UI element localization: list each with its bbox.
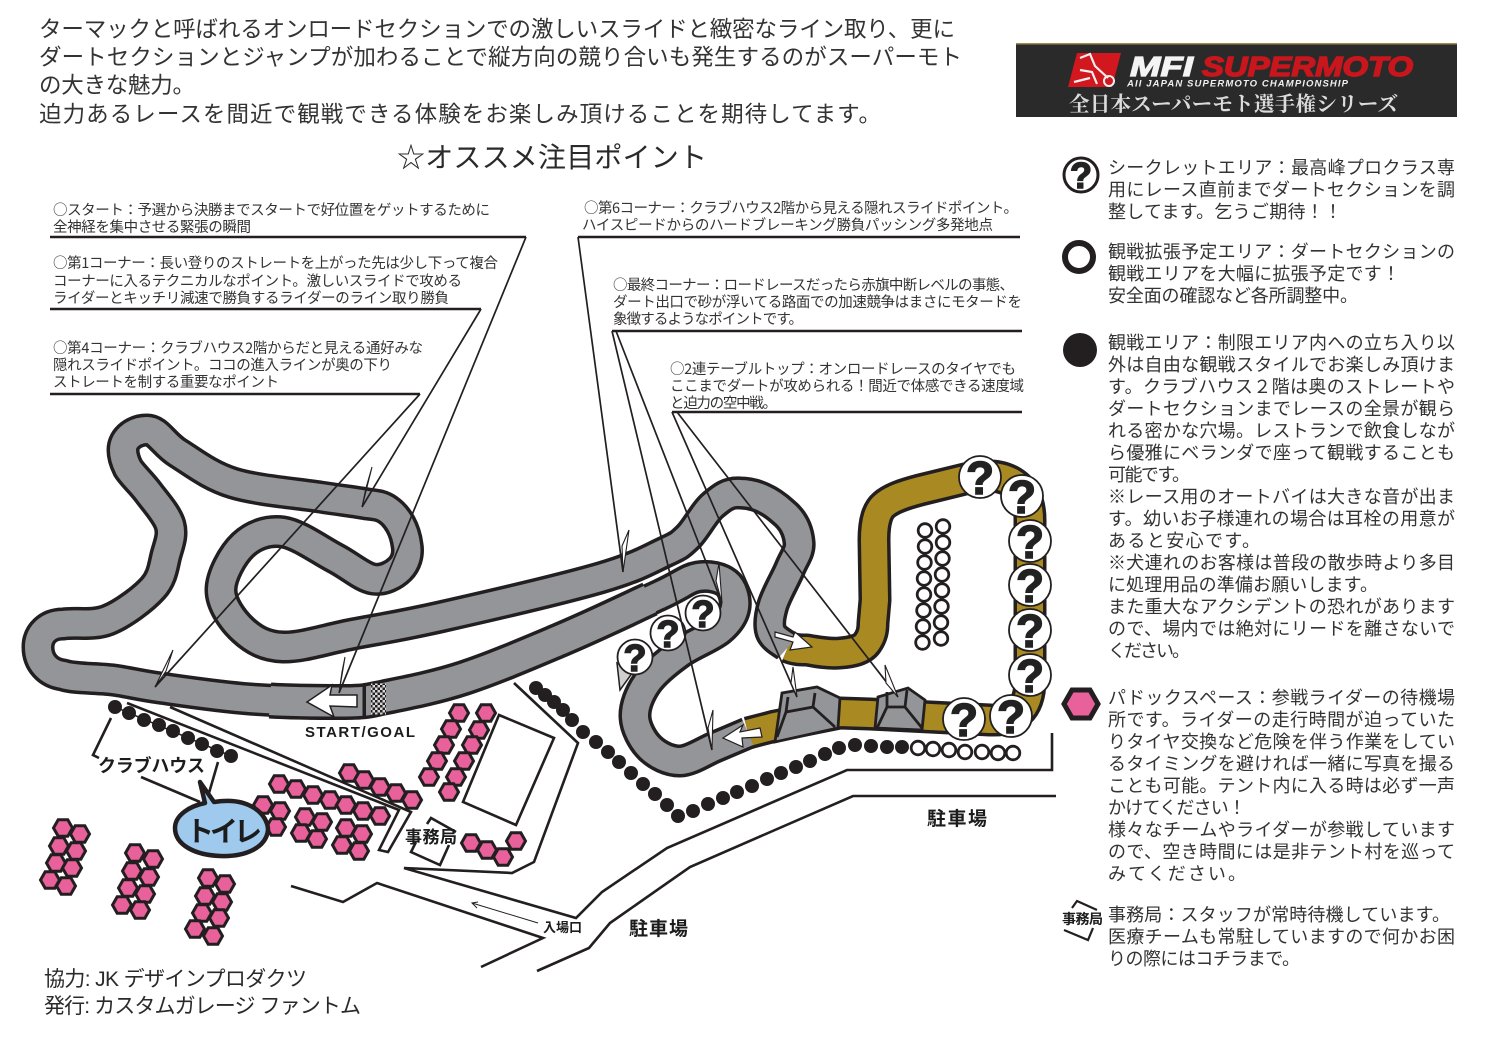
legend: viewing area: ※レース用のオートバイは大きな音が出ま bbox=[1108, 487, 1455, 507]
secret area markers: ? bbox=[1016, 605, 1044, 657]
arrow: direction at start bbox=[307, 685, 357, 717]
legend: paddock: ので、空き時間には是非テント村を巡って bbox=[1108, 842, 1455, 862]
callout: double tabletop: ○2連テーブルトップ：オンロードレースのタイヤでも bbox=[670, 358, 1016, 379]
map labels: 事務局 bbox=[405, 828, 457, 847]
callout: final corner: 象徴するようなポイントです。 bbox=[613, 308, 803, 329]
legend: secret area: 整してます。乞うご期待！！ bbox=[1108, 202, 1342, 222]
secret area markers: ? bbox=[1008, 471, 1036, 523]
icon: open circle bbox=[1065, 243, 1093, 271]
icon: motorcycle logo mark bbox=[1068, 53, 1121, 87]
legend: office: 医療チームも常駐していますので何かお困 bbox=[1108, 927, 1455, 947]
paddock tents bbox=[40, 705, 526, 944]
map labels: クラブハウス bbox=[98, 755, 205, 776]
callout: corner 4: ○第4コーナー：クラブハウス2階からだと見える通好みな bbox=[53, 337, 423, 358]
secret area markers: ? bbox=[1016, 516, 1044, 568]
logo banner: SUPERMOTO bbox=[1202, 51, 1413, 82]
track: dirt section fill bbox=[748, 476, 1030, 733]
map labels: START/GOAL bbox=[305, 724, 415, 741]
intro text block: 迫力あるレースを間近で観戦できる体験をお楽しみ頂けることを期待してます。 bbox=[39, 102, 881, 127]
map labels: 駐車場 bbox=[629, 918, 688, 940]
callouts: left annotations bbox=[50, 199, 526, 693]
legend: paddock bbox=[1064, 688, 1455, 884]
arrow: direction at dirt exit bbox=[723, 725, 762, 747]
callout: double tabletop: と迫力の空中戦。 bbox=[670, 392, 777, 413]
intro text block bbox=[39, 17, 962, 127]
map labels: 入場口 bbox=[543, 920, 582, 935]
map labels: 駐車場 bbox=[927, 808, 987, 830]
callout: final corner bbox=[612, 274, 1022, 750]
legend: secret area: シークレットエリア：最高峰プロクラス専 bbox=[1108, 158, 1455, 178]
legend: viewing area: 可能です。 bbox=[1108, 465, 1190, 485]
callout: double tabletop: ここまでダートが攻められる！間近で体感できる速度域 bbox=[670, 375, 1024, 396]
legend: paddock: 所です。ライダーの走行時間が迫っていた bbox=[1108, 710, 1455, 730]
legend: viewing area: 観戦エリア：制限エリア内への立ち入り以 bbox=[1108, 333, 1455, 353]
logo banner bbox=[1016, 43, 1457, 117]
secret area markers: ? bbox=[656, 614, 680, 656]
callout: final corner: ダート出口で砂が浮いてる路面での加速競争はまさにモタードを bbox=[613, 291, 1022, 312]
legend: viewing area: ら優雅にベランダで座って観戦することも bbox=[1108, 443, 1455, 463]
legend: viewing area: あると安心です。 bbox=[1108, 531, 1260, 551]
legend: viewing area: ので、場内では絶対にリードを離さないで bbox=[1108, 619, 1455, 639]
callout: corner 4 bbox=[50, 337, 423, 687]
credits: 協力: JK デザインプロダクツ bbox=[44, 968, 307, 991]
icon: solid circle bbox=[1063, 333, 1097, 367]
callout: corner 4: ストレートを制する重要なポイント bbox=[53, 371, 279, 392]
secret area markers: ? bbox=[623, 638, 647, 680]
secret area markers: ? bbox=[997, 691, 1025, 743]
intro text block: の大きな魅力。 bbox=[39, 73, 195, 98]
callout: start: ○スタート：予選から決勝までスタートで好位置をゲットするために bbox=[53, 199, 490, 220]
icon: pink hexagon bbox=[1064, 690, 1098, 718]
intro text block: ターマックと呼ばれるオンロードセクションでの激しいスライドと緻密なライン取り、更に bbox=[39, 17, 955, 42]
logo banner: MFI bbox=[1130, 51, 1195, 82]
heading: recommended points: ☆オススメ注目ポイント bbox=[397, 142, 707, 173]
legend: viewing area: ※犬連れのお客様は普段の散歩時より多目 bbox=[1108, 553, 1455, 573]
course map bbox=[38, 430, 1056, 971]
callout: start bbox=[50, 199, 526, 693]
callout: corner 1 bbox=[50, 252, 498, 507]
callout: corner 6: ハイスピードからのハードブレーキング勝負パッシング多発地点 bbox=[582, 214, 993, 235]
legend: viewing area: ダートセクションまでレースの全景が観ら bbox=[1108, 399, 1455, 419]
legend: office: りの際にはコチラまで。 bbox=[1108, 949, 1300, 969]
legend: paddock: パドックスペース：参戦ライダーの待機場 bbox=[1108, 688, 1455, 708]
start line and checker bbox=[362, 684, 386, 716]
map labels bbox=[98, 724, 987, 940]
icon: question mark bbox=[1064, 155, 1098, 196]
icon: question mark: ? bbox=[1070, 155, 1092, 196]
callout: corner 1: ○第1コーナー：長い登りのストレートを上がった先は少し下って複合 bbox=[53, 252, 498, 273]
solid spectator dots bbox=[108, 681, 909, 823]
legend: paddock: かけてください！ bbox=[1108, 798, 1246, 818]
small grey run-off next to jumps bbox=[617, 663, 633, 690]
tabletop jump 2 bbox=[875, 688, 925, 730]
legend: viewing area: 外は自由な観戦スタイルでお楽しみ頂けま bbox=[1108, 355, 1455, 375]
legend: paddock: るタイミングを避ければ一緒に写真を撮る bbox=[1108, 754, 1455, 774]
legend: paddock: みてください。 bbox=[1108, 864, 1246, 884]
callout: double tabletop bbox=[670, 358, 1024, 697]
callouts: right annotations bbox=[578, 197, 1024, 750]
icon: office: 事務局 bbox=[1062, 911, 1103, 927]
open spectator dots bbox=[911, 520, 1020, 760]
icon: office bbox=[1062, 901, 1103, 940]
legend: expansion area bbox=[1065, 242, 1455, 306]
legend: viewing area: れる密かな穴場。レストランで飲食しなが bbox=[1108, 421, 1455, 441]
legend: viewing area: す。幼いお子様連れの場合は耳栓の用意が bbox=[1108, 509, 1455, 529]
legend: paddock: ことも可能。テント内に入る時は必ず一声 bbox=[1108, 776, 1455, 796]
callout: corner 4: 隠れスライドポイント。ココの進入ラインが奥の下り bbox=[53, 354, 392, 375]
callout: corner 6 bbox=[578, 197, 1020, 572]
secret area markers: ? bbox=[691, 594, 715, 636]
legend: expansion area: 観戦エリアを大幅に拡張予定です！ bbox=[1108, 264, 1400, 284]
callout: final corner: ○最終コーナー：ロードレースだったら赤旗中断レベルの事態、 bbox=[613, 274, 1014, 295]
legend: expansion area: 安全面の確認など各所調整中。 bbox=[1108, 286, 1358, 306]
secret area markers: ? bbox=[950, 694, 978, 746]
toilet bubble bbox=[175, 782, 268, 856]
intro text block: ダートセクションとジャンプが加わることで縦方向の競り合いも発生するのがスーパーモト bbox=[39, 45, 962, 70]
secret area markers bbox=[618, 452, 1051, 746]
legend: secret area bbox=[1064, 155, 1455, 222]
track: dirt section outline bbox=[748, 476, 1030, 733]
legend: paddock: 様々なチームやライダーが参戦しています bbox=[1108, 820, 1455, 840]
logo banner: 全日本スーパーモト選手権シリーズ bbox=[1069, 93, 1398, 116]
legend: viewing area: す。クラブハウス２階は奥のストレートや bbox=[1108, 376, 1455, 397]
legend panel bbox=[1062, 155, 1455, 969]
credits: 発行: カスタムガレージ ファントム bbox=[44, 995, 361, 1018]
logo banner: AII JAPAN SUPERMOTO CHAMPIONSHIP bbox=[1126, 78, 1349, 90]
track: tarmac fill bbox=[38, 430, 799, 761]
toilet bubble: トイレ bbox=[186, 816, 262, 847]
callout: corner 1: コーナーに入るテクニカルなポイント。激しいスライドで攻める bbox=[53, 270, 462, 291]
legend: viewing area: また重大なアクシデントの恐れがあります bbox=[1108, 597, 1455, 617]
callout: start: 全神経を集中させる緊張の瞬間 bbox=[53, 216, 251, 237]
legend: secret area: 用にレース直前までダートセクションを調 bbox=[1108, 180, 1455, 200]
tabletop jump 1 bbox=[775, 687, 840, 742]
track: tarmac outline bbox=[38, 430, 799, 761]
legend: paddock: りタイヤ交換など危険を伴う作業をしてい bbox=[1108, 732, 1455, 752]
legend: office bbox=[1062, 901, 1455, 969]
legend: viewing area: に処理用品の準備お願いします。 bbox=[1108, 575, 1378, 595]
track: wide start straight fill bbox=[270, 599, 650, 702]
parking and road outlines bbox=[93, 683, 1056, 971]
callout: corner 1: ライダーとキッチリ減速で勝負するライダーのライン取り勝負 bbox=[53, 287, 449, 308]
track: wide start straight outline bbox=[270, 599, 650, 702]
legend: viewing area: ください。 bbox=[1108, 641, 1190, 661]
credits bbox=[44, 968, 361, 1018]
arrow: direction at dirt entry bbox=[775, 632, 812, 650]
secret area markers: ? bbox=[966, 452, 994, 504]
secret area markers: ? bbox=[1016, 560, 1044, 612]
legend: expansion area: 観戦拡張予定エリア：ダートセクションの bbox=[1108, 242, 1455, 262]
legend: viewing area bbox=[1063, 333, 1455, 661]
legend: office: 事務局：スタッフが常時待機しています。 bbox=[1108, 905, 1450, 925]
callout: corner 6: ○第6コーナー：クラブハウス2階から見える隠れスライドポイント。 bbox=[584, 197, 1018, 218]
secret area markers: ? bbox=[1016, 650, 1044, 702]
